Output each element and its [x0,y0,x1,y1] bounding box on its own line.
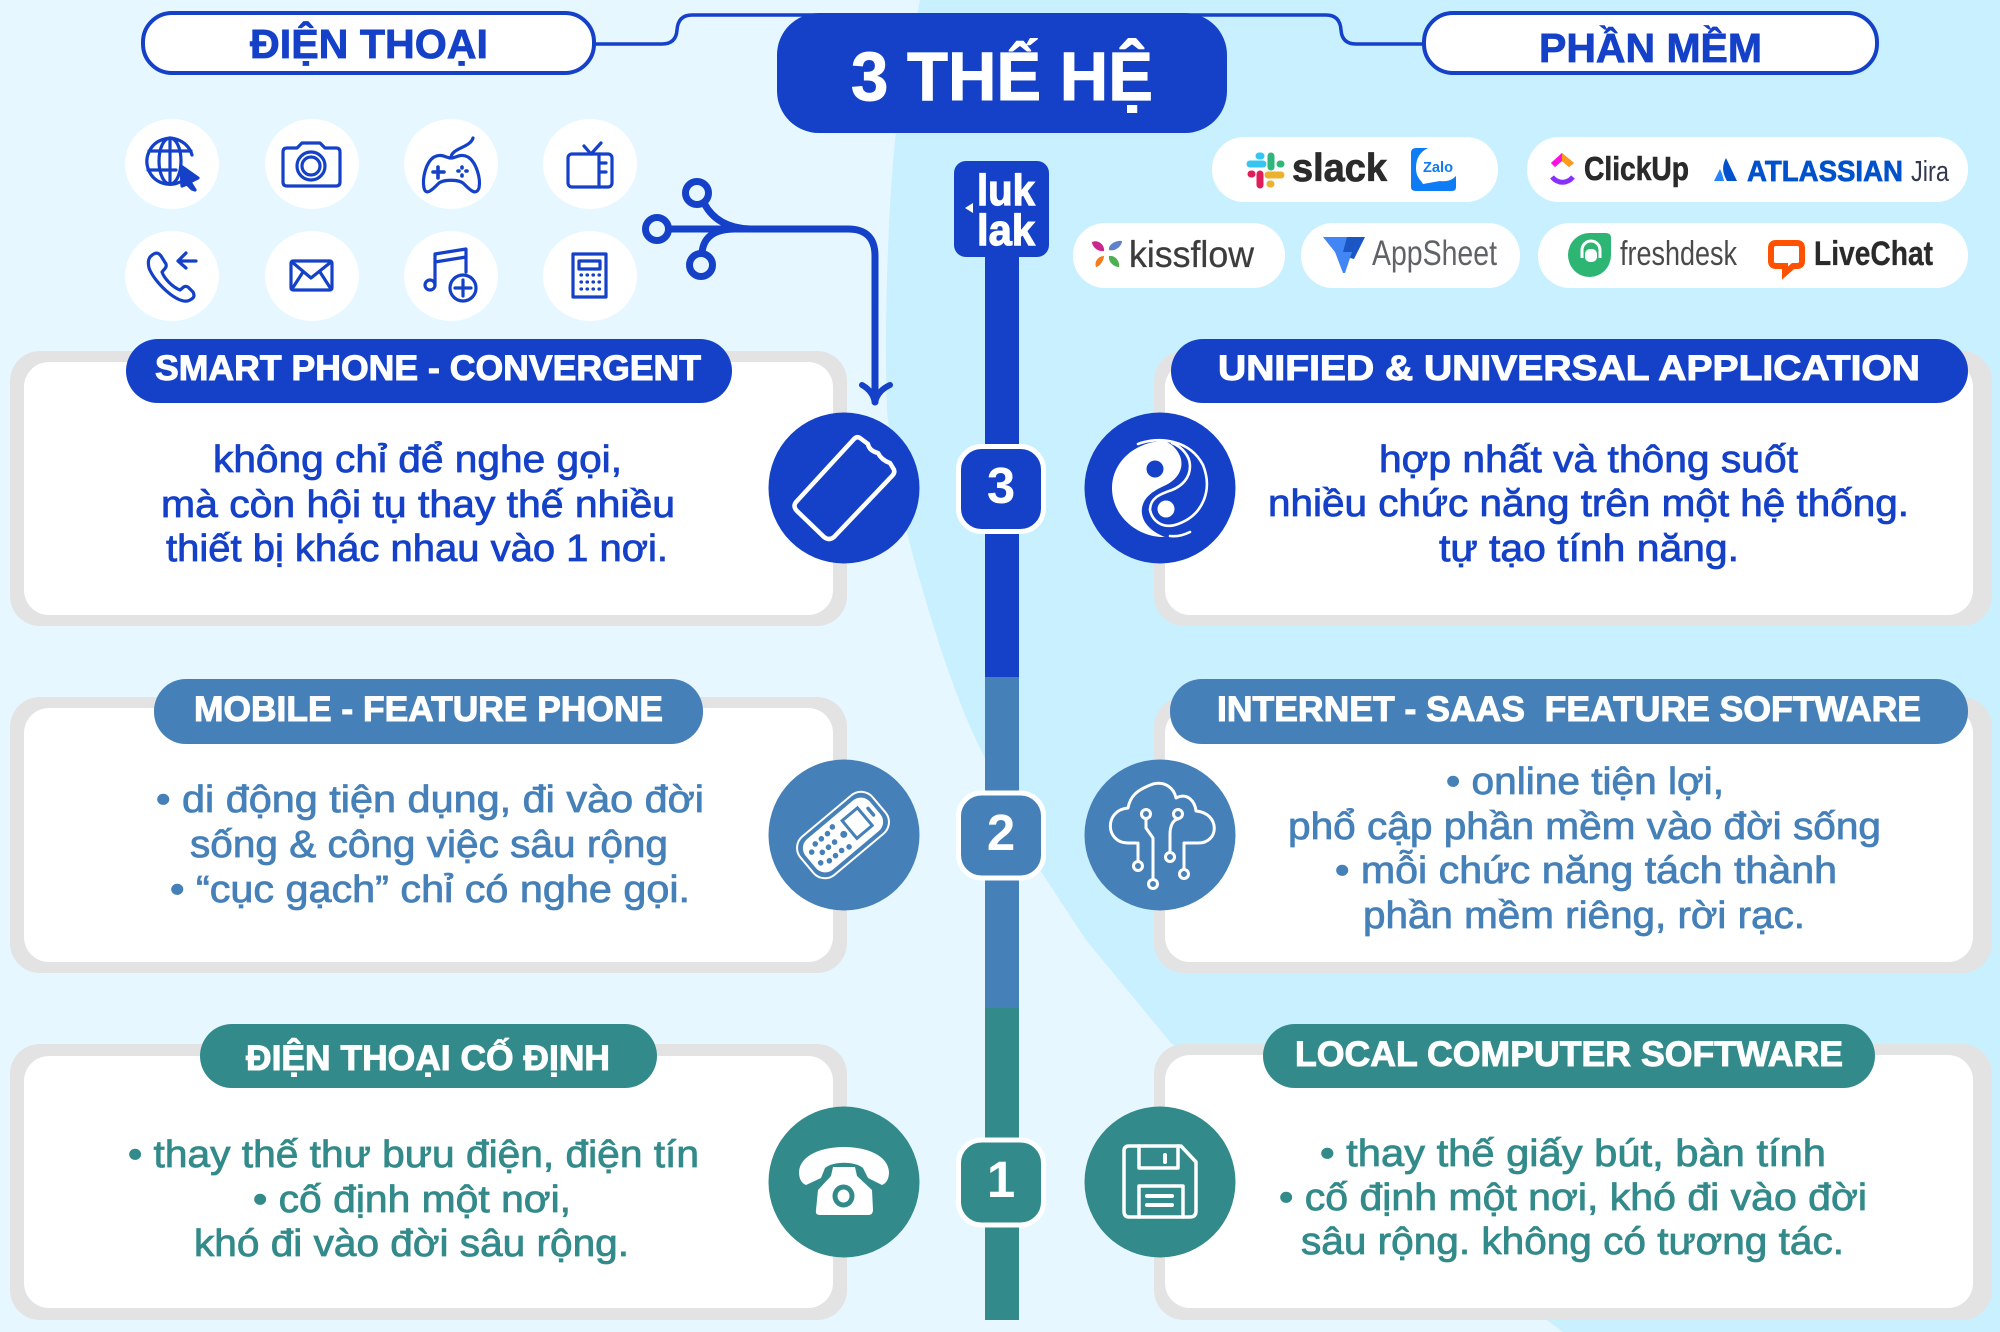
panel text: thiết bị khác nhau vào 1 nơi. [166,528,668,570]
panel: internet saas feature software [1154,679,1992,973]
timeline badge 2: 2 [987,804,1015,861]
panel text: nhiều chức năng trên một hệ thống. [1268,483,1909,525]
icon: globe with cursor [147,138,198,190]
logo pills: software brands [1073,137,1968,288]
icon: rotary telephone [768,1106,920,1258]
panel text: • mỗi chức năng tách thành [1335,849,1837,892]
panel text: sống & công việc sâu rộng [190,824,668,866]
panel text: • di động tiện dụng, đi vào đời [156,779,704,821]
logo: Luk Lak [954,161,1049,257]
connector lines from title to category pills [594,15,1424,44]
timeline badge 3 [958,446,1044,532]
logo: slack: slack [1292,147,1387,190]
icon: envelope [291,261,332,290]
title [777,13,1227,133]
logo: freshdesk: freshdesk [1620,235,1738,273]
timeline badge 2 [958,793,1044,878]
logo: Luk Lak: luk [977,166,1035,215]
panel text [156,779,704,911]
panel heading: UNIFIED & UNIVERSAL APPLICATION [1218,349,1920,388]
panel text: mà còn hội tụ thay thế nhiều [161,484,675,526]
logo: slack [1250,147,1387,190]
logo: kissflow: kissflow [1129,234,1254,275]
panel: smart phone convergent [10,339,847,626]
panel text: • thay thế thư bưu điện, điện tín [128,1134,699,1176]
title: 3 THẾ HỆ [851,38,1153,115]
panel text [1268,439,1909,570]
logo: ClickUp: ClickUp [1584,150,1689,187]
timeline bar [985,250,1019,1320]
panel heading: INTERNET - SAAS FEATURE SOFTWARE [1217,690,1921,729]
panel heading [1171,339,1968,403]
panel text [1288,761,1881,937]
panel: unified and universal application [1154,339,1992,626]
logo: Atlassian Jira: ATLASSIAN [1747,156,1903,188]
panel heading: MOBILE - FEATURE PHONE [194,690,663,729]
icon: music note with plus [425,249,476,301]
icon: yin yang [1084,412,1236,564]
panel heading [126,339,732,403]
category pill: ĐIỆN THOẠI [143,13,594,73]
icon: cloud circuit [1084,760,1236,910]
feature icons: smartphone functions [125,119,637,321]
timeline badge 1: 1 [987,1151,1015,1208]
panel text: phần mềm riêng, rời rạc. [1363,895,1805,937]
panel: fixed telephone [10,1024,847,1320]
panel text: sâu rộng. không có tương tác. [1301,1221,1844,1263]
logo: LiveChat: LiveChat [1814,235,1933,273]
panel heading [1263,1024,1875,1088]
icon: camera [283,143,340,186]
logo: Luk Lak: lak [977,206,1035,255]
panel text: • cố định một nơi, khó đi vào đời [1279,1177,1867,1219]
category pill: ĐIỆN THOẠI: ĐIỆN THOẠI [250,21,488,67]
panel text: hợp nhất và thông suốt [1379,439,1798,481]
category pill: PHẦN MỀM: PHẦN MỀM [1539,25,1762,71]
icon: game controller [423,138,479,192]
logo: LiveChat [1771,235,1933,273]
panel heading: ĐIỆN THOẠI CỐ ĐỊNH [246,1038,610,1078]
arrow: branching connector to smartphone [646,182,890,403]
panel heading [200,1024,657,1088]
icon: smartphone [768,412,920,564]
icon: floppy disk [1084,1106,1236,1258]
icon: feature phone [768,760,920,910]
logo: AppSheet [1323,234,1497,273]
logo: ClickUp [1551,150,1689,187]
panel text: khó đi vào đời sâu rộng. [194,1223,629,1265]
logo: Atlassian Jira: Jira [1911,156,1950,188]
timeline badge 1 [958,1140,1044,1225]
logo: freshdesk [1568,233,1738,277]
icon: television [568,143,612,187]
category pill: PHẦN MỀM [1424,13,1877,73]
timeline badge 3: 3 [987,457,1015,514]
logo: Zalo [1411,148,1456,191]
panel: mobile feature phone [10,679,847,973]
logo: AppSheet: AppSheet [1372,234,1497,273]
panel text: tự tạo tính năng. [1439,528,1739,570]
icon: incoming call [148,253,196,301]
panel text: • “cục gạch” chỉ có nghe gọi. [170,869,690,911]
panel text: phổ cập phần mềm vào đời sống [1288,806,1881,848]
panel heading: LOCAL COMPUTER SOFTWARE [1295,1035,1843,1074]
panel text [1279,1133,1867,1263]
panel text: • cố định một nơi, [253,1179,571,1221]
panel text: không chỉ để nghe gọi, [213,439,622,481]
panel heading: SMART PHONE - CONVERGENT [155,349,701,388]
panel text: • thay thế giấy bút, bàn tính [1320,1133,1826,1175]
logo: Atlassian Jira [1714,156,1950,188]
icon: calculator [573,254,606,297]
panel text [128,1134,699,1265]
panel text: • online tiện lợi, [1446,761,1724,803]
panel: local computer software [1154,1024,1992,1320]
panel heading [154,679,703,744]
panel text [161,439,675,570]
logo: Zalo: Zalo [1423,159,1453,176]
panel heading [1170,679,1968,744]
